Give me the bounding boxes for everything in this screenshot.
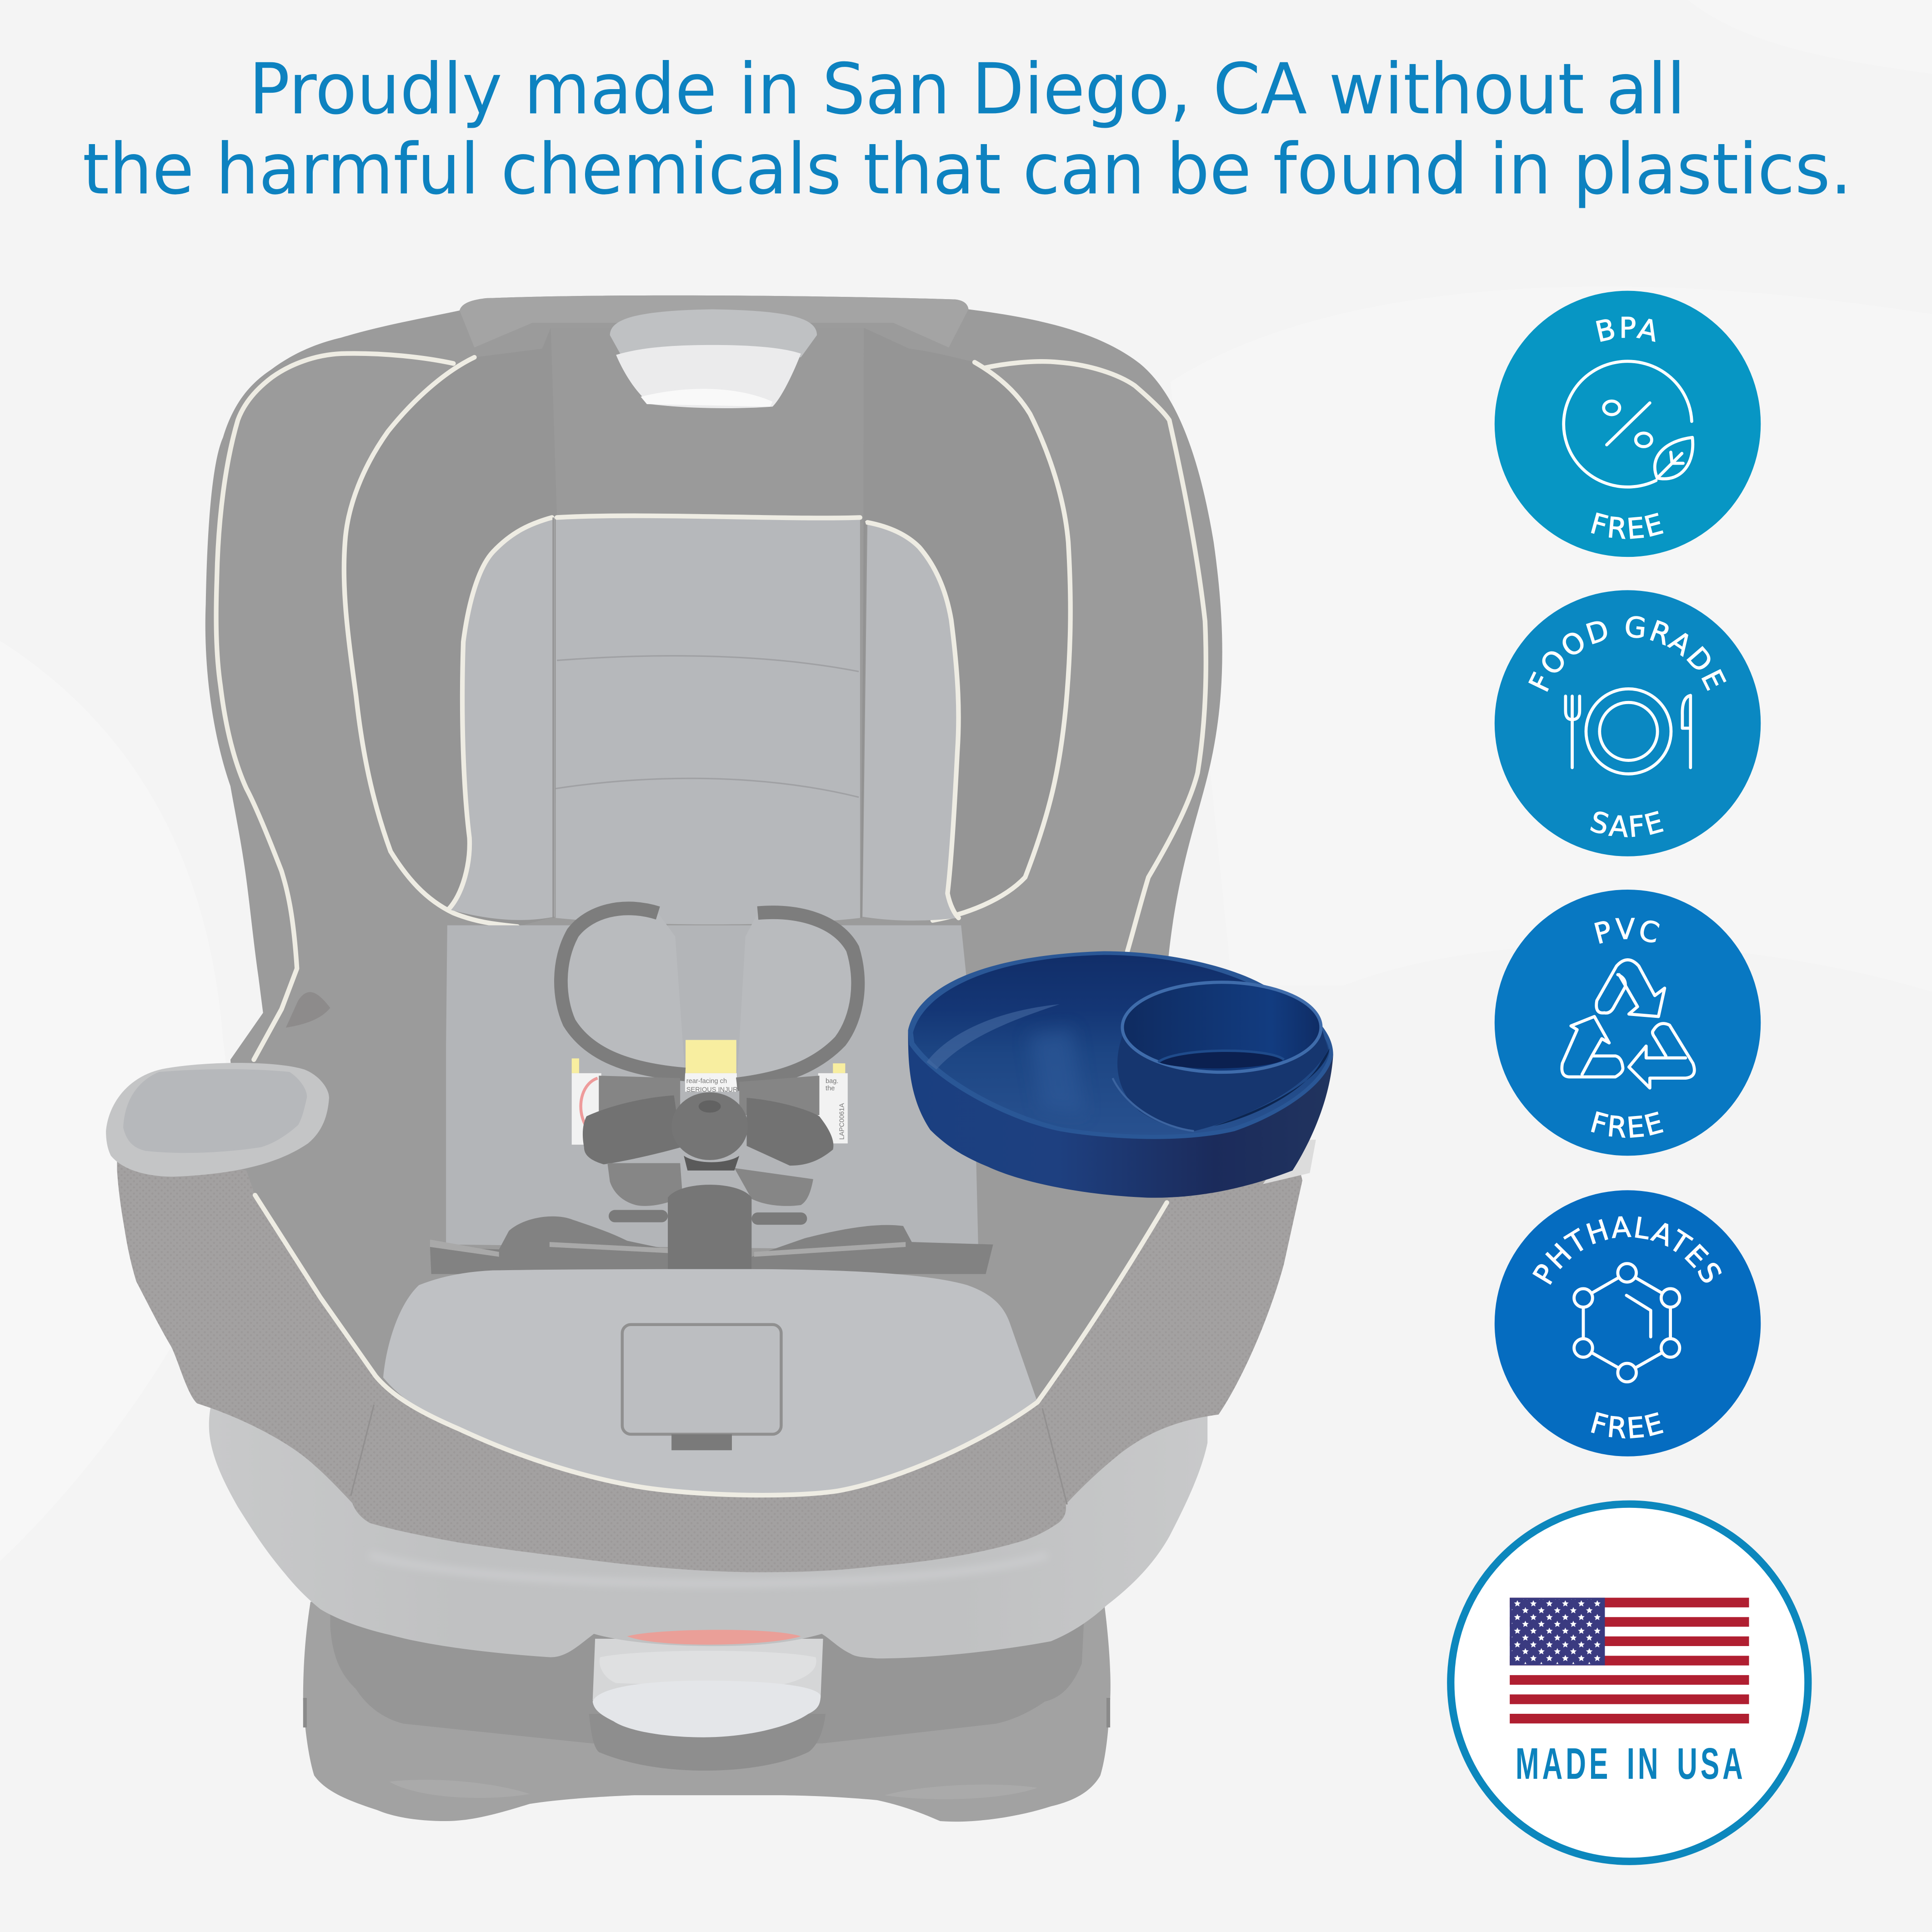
warning label: the xyxy=(826,1085,835,1092)
right wing bolster xyxy=(862,328,1071,921)
badge: BPA free: BPA xyxy=(1592,311,1663,349)
floor highlight xyxy=(926,1004,1060,1070)
badge: made in USA: MADE IN USA xyxy=(1516,1739,1746,1788)
seat base xyxy=(303,1602,1111,1822)
arm and front mesh band xyxy=(117,1140,1302,1572)
headrest top band xyxy=(460,295,968,347)
buckle pad xyxy=(622,1325,781,1434)
outer piping xyxy=(216,353,453,1060)
floor light patch xyxy=(1029,1029,1084,1115)
badge: BPA free xyxy=(1495,291,1761,557)
heading: the harmful chemicals that can be found in plastics. xyxy=(83,129,1852,210)
badge: PVC free: PVC xyxy=(1591,912,1664,951)
tray clamp xyxy=(1263,1140,1316,1184)
right back cushion xyxy=(862,522,959,921)
carry handle xyxy=(610,309,817,408)
icon: US flag xyxy=(1510,1598,1749,1723)
side recess detail xyxy=(286,992,330,1028)
centre back cushion xyxy=(553,516,865,925)
red release strip xyxy=(627,1630,801,1645)
badge: food grade safe: SAFE xyxy=(1587,805,1669,844)
badge: BPA free: FREE xyxy=(1587,506,1668,546)
release pedal xyxy=(589,1639,826,1771)
badge: phthalates free xyxy=(1495,1190,1761,1457)
navy snack tray xyxy=(908,951,1333,1198)
badge: food grade safe: FOOD GRADE xyxy=(1522,610,1733,697)
icon: molecule xyxy=(1574,1264,1680,1382)
tray bowl xyxy=(913,955,1330,1135)
lap belts xyxy=(430,1216,993,1274)
warning label: rear-facing ch xyxy=(686,1077,727,1085)
tray rim xyxy=(908,951,1333,1139)
cup well outer wall xyxy=(1117,1025,1328,1131)
heading: Proudly made in San Diego, CA without all xyxy=(249,49,1686,130)
tray wall xyxy=(908,1030,1333,1198)
cup wall base line xyxy=(1113,1078,1194,1131)
badge: PVC free xyxy=(1495,890,1761,1156)
seat cushion xyxy=(383,1269,1037,1495)
icon: percent leaf xyxy=(1564,361,1693,487)
warning label: SERIOUS INJURY xyxy=(686,1086,742,1093)
left cup holder xyxy=(106,1063,329,1176)
badge: phthalates free: FREE xyxy=(1587,1406,1668,1445)
left wing bolster xyxy=(344,328,557,926)
faded car seat xyxy=(106,295,1316,1822)
warning label: LAPC0061A xyxy=(839,1103,846,1140)
warning label: bag. xyxy=(826,1077,838,1085)
warning label xyxy=(572,1040,848,1145)
back shell xyxy=(205,295,1222,1417)
cup well xyxy=(1122,982,1321,1072)
heading xyxy=(83,49,1852,210)
icon: recycle xyxy=(1562,960,1694,1088)
shell front lip highlight xyxy=(370,1555,1047,1584)
badge: made in USA xyxy=(1451,1504,1808,1862)
left back cushion xyxy=(449,516,555,920)
chest clip and buckle xyxy=(583,1076,833,1225)
plastic shell xyxy=(209,1398,1207,1658)
chest pads xyxy=(561,908,858,1084)
crotch strap xyxy=(668,1185,751,1275)
channel xyxy=(1214,1049,1330,1126)
icon: plate and cutlery xyxy=(1566,689,1691,774)
badge: PVC free: FREE xyxy=(1587,1106,1668,1145)
centre head panel xyxy=(551,328,867,522)
badge: phthalates free: PHTHALATES xyxy=(1527,1210,1729,1290)
lower back cushion xyxy=(446,926,978,1251)
badge: food grade safe xyxy=(1495,590,1761,856)
